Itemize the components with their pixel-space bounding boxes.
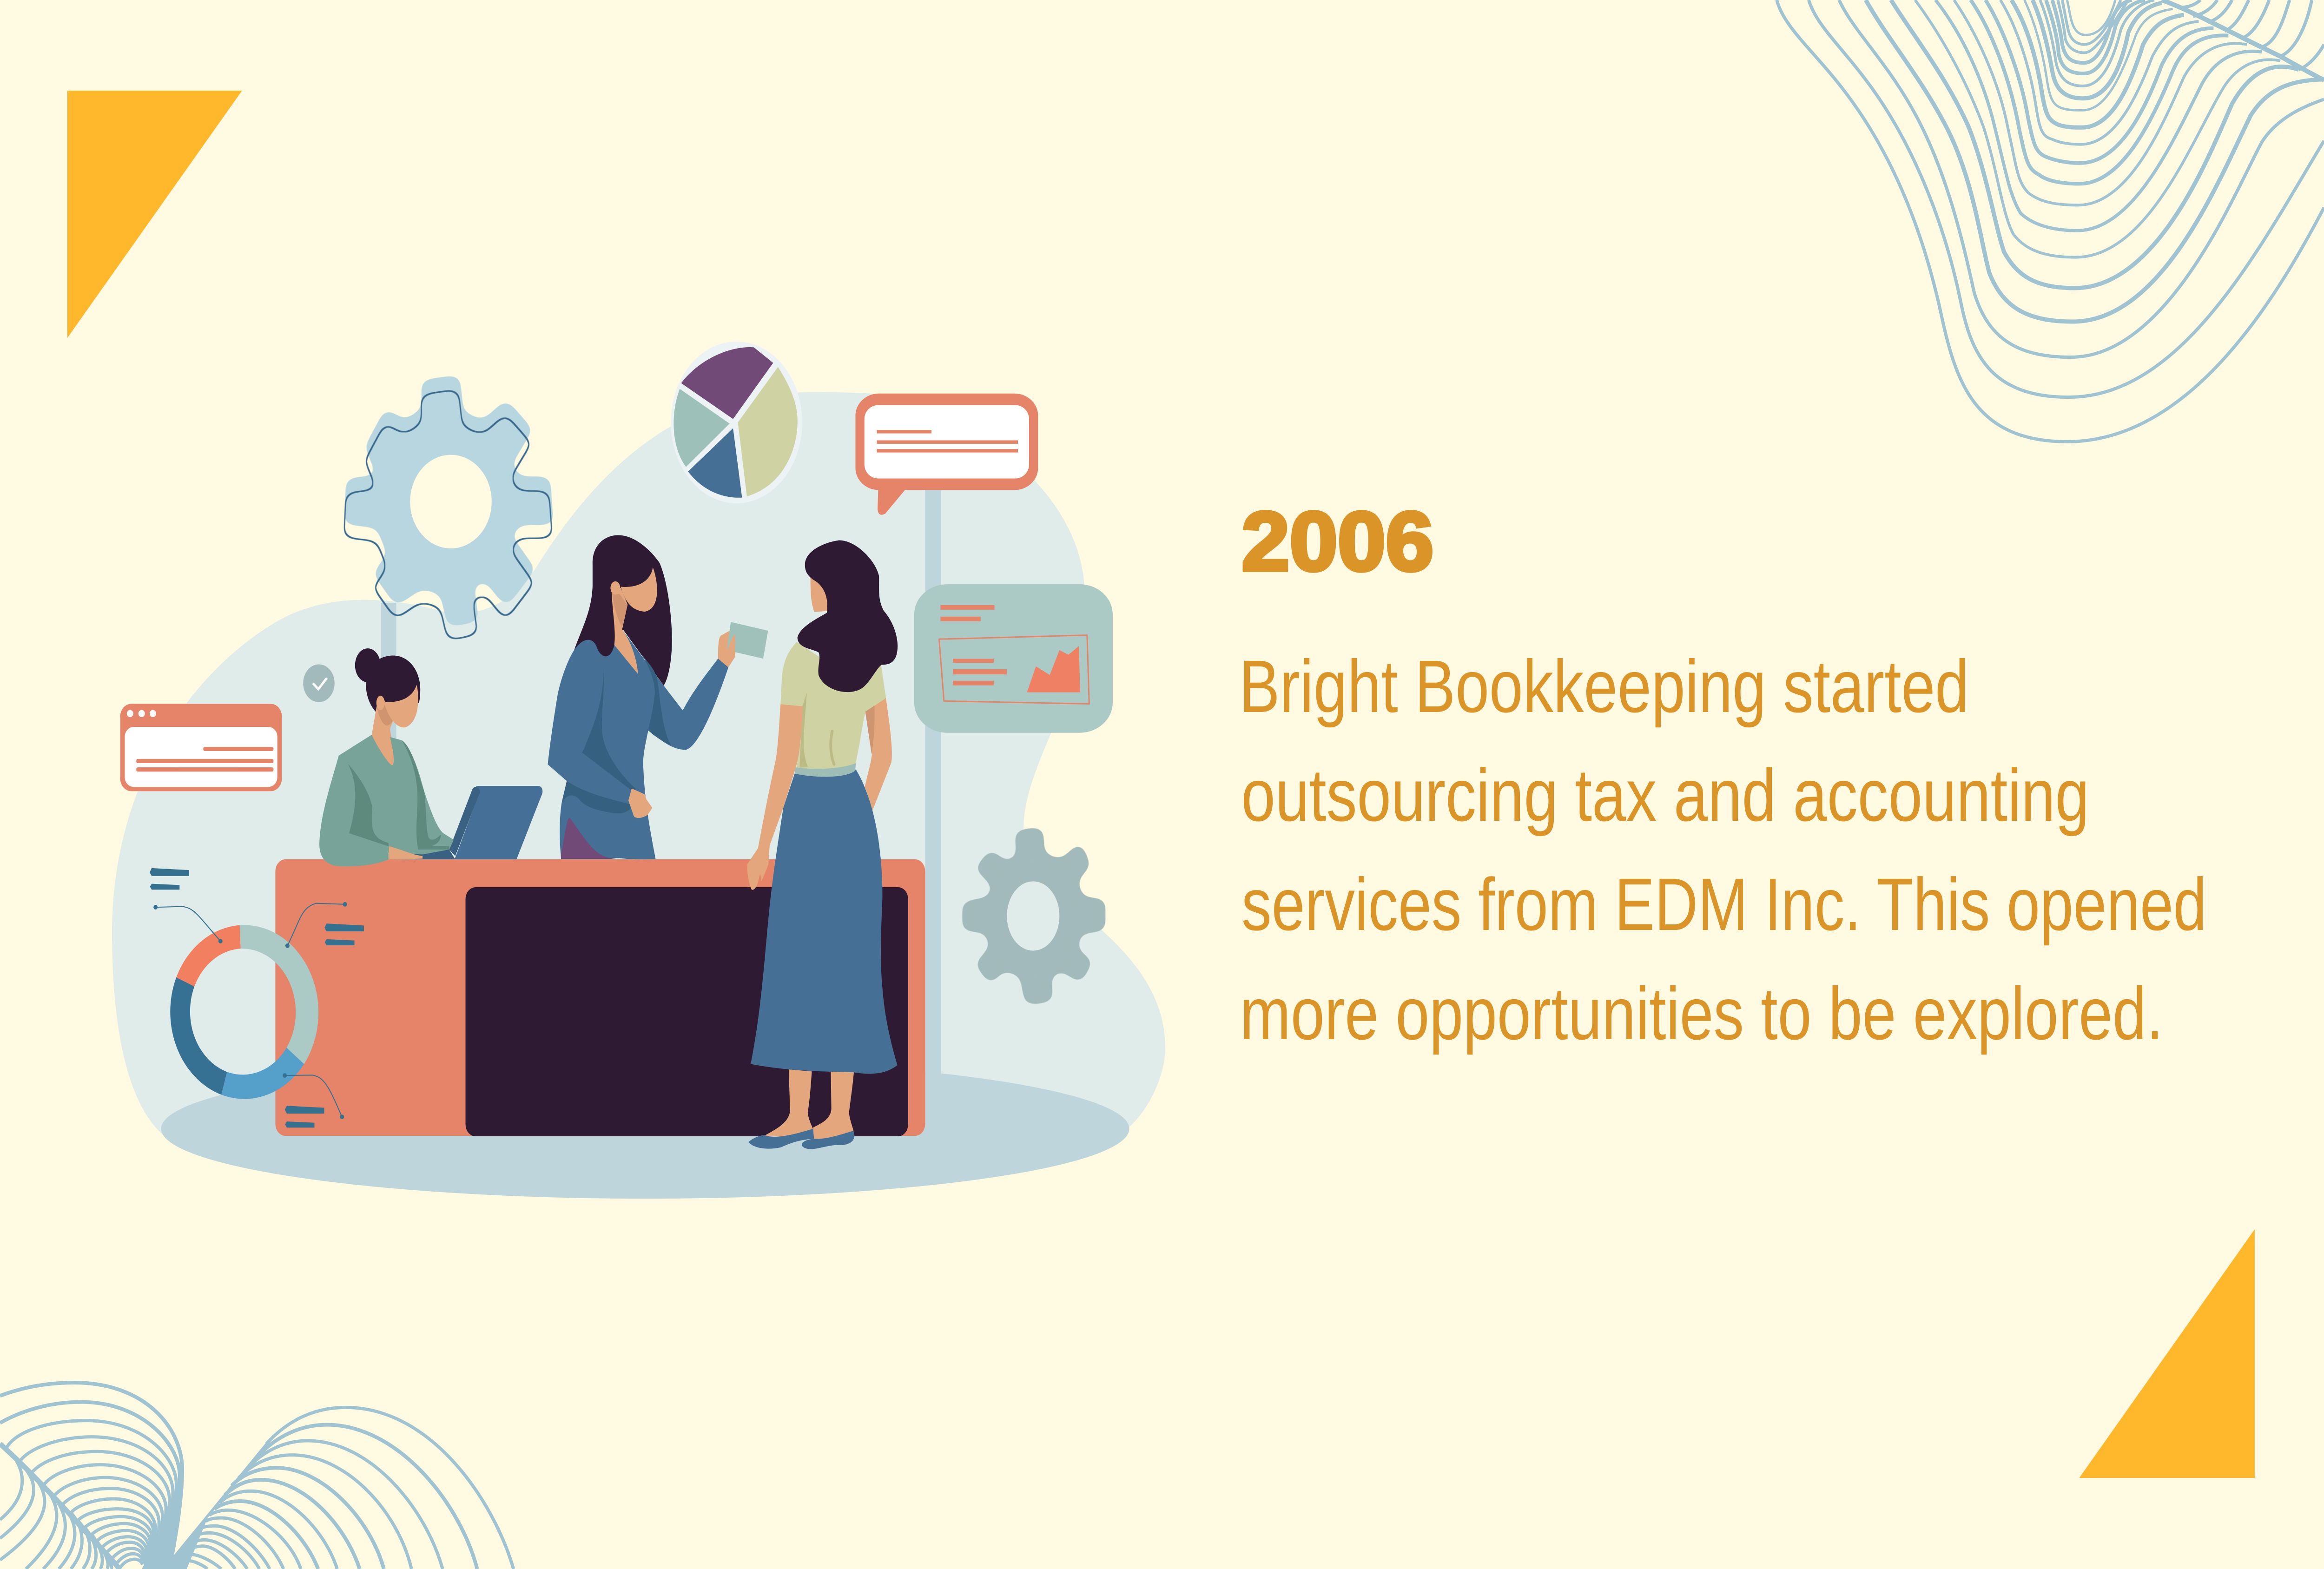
desk: [275, 859, 925, 1136]
woman in blue blazer: [548, 535, 768, 859]
pie chart: [671, 342, 802, 503]
icon: small gear: [963, 827, 1105, 1005]
donut chart with callouts: [150, 868, 364, 1127]
speech bubble: [855, 394, 1038, 515]
woman in skirt: [747, 541, 898, 1149]
body text: outsourcing tax and accounting: [1241, 754, 2089, 837]
browser window: [120, 704, 282, 791]
triangle: bottom right: [2079, 1229, 2255, 1478]
contour lines: bottom left: [0, 1383, 514, 1569]
triangle: top left: [67, 91, 242, 338]
icon: large gear: [343, 375, 553, 641]
body text: Bright Bookkeeping started: [1239, 646, 1969, 728]
illustration: office scene: [112, 342, 1165, 1199]
heading: year: 2006: [1241, 495, 1433, 588]
contour lines: top right: [1777, 0, 2324, 442]
dashboard card with area chart: [914, 584, 1113, 733]
background blob and floor: [112, 392, 1165, 1199]
body text: services from EDM Inc. This opened: [1241, 864, 2207, 946]
icon: check badge: [303, 664, 335, 702]
woman at laptop: [319, 648, 542, 866]
body text: more opportunities to be explored.: [1240, 973, 2163, 1055]
body text: [1239, 646, 2207, 1055]
